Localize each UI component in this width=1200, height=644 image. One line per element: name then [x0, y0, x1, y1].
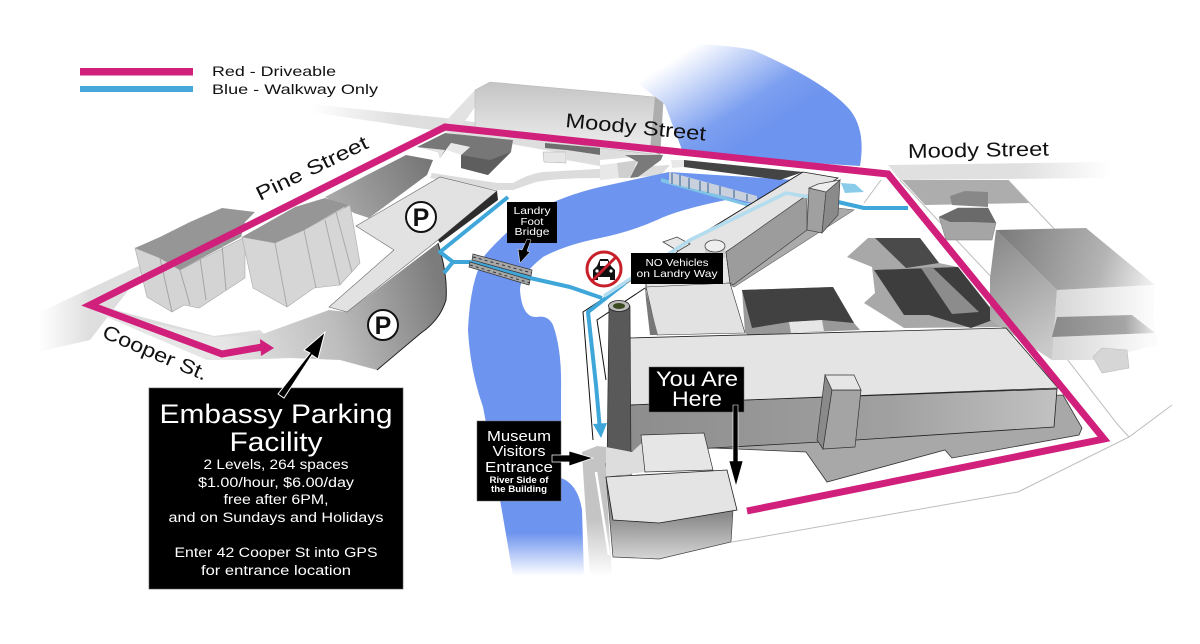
parking deck	[329, 177, 498, 312]
arrow: to foot bridge	[518, 239, 531, 263]
street label: Moody Street right: Moody Street	[908, 139, 1050, 163]
callout: Landry Foot Bridge	[507, 202, 557, 243]
riverside strip	[582, 446, 612, 576]
mill tower	[807, 180, 840, 233]
callout: Museum Visitors Entrance	[477, 421, 561, 501]
walkway arrowhead	[593, 423, 607, 438]
street label: Moody Street centre: Moody Street	[565, 110, 707, 146]
chimney	[606, 300, 632, 476]
callout heading: Facility	[230, 427, 323, 457]
apartment building A	[135, 208, 255, 312]
front museum building	[606, 433, 737, 559]
river	[468, 44, 864, 576]
callout: Museum Visitors Entrance: Visitors	[492, 443, 546, 460]
callout details	[168, 457, 384, 578]
parking symbol upper: P	[413, 204, 429, 232]
pond	[841, 183, 864, 193]
dark building 1	[738, 287, 860, 335]
parking symbol lower	[368, 310, 398, 340]
long mill building	[645, 172, 838, 335]
callout: Landry Foot Bridge: Foot	[520, 216, 544, 228]
callout: Museum Visitors Entrance: Museum	[487, 428, 551, 445]
route arrowhead	[260, 339, 274, 356]
callout details: for entrance location	[201, 563, 351, 578]
wall tower	[817, 375, 861, 449]
dark building 2	[847, 238, 1006, 328]
driveable route	[90, 127, 1104, 511]
big building right	[990, 228, 1158, 373]
callout: You Are Here: You Are	[656, 368, 738, 391]
callout details: Enter 42 Cooper St into GPS	[174, 545, 378, 560]
callout heading	[160, 399, 392, 457]
main mill roof	[628, 328, 1058, 405]
callout: Museum Visitors Entrance: Entrance	[485, 459, 553, 476]
legend label: walkway: Blue - Walkway Only	[212, 81, 378, 97]
street label: Cooper St.: Cooper St.	[99, 321, 211, 385]
callout heading: Embassy Parking	[160, 399, 392, 429]
building block C	[325, 155, 433, 218]
main mill wall	[629, 389, 1057, 452]
row buildings on Moody Street	[417, 133, 684, 180]
callout: Embassy Parking Facility	[149, 388, 403, 589]
callout: Landry Foot Bridge: Bridge	[514, 226, 550, 238]
callout details: and on Sundays and Holidays	[168, 510, 384, 525]
dam	[661, 160, 803, 208]
street label: Pine Street: Pine Street	[253, 132, 372, 205]
outer site outlines	[732, 180, 1172, 542]
roads	[38, 90, 1110, 358]
icon: no vehicles	[587, 252, 621, 286]
roof hatch	[663, 237, 690, 251]
small buildings by Moody Street	[902, 180, 1029, 240]
upper river	[612, 44, 862, 166]
apartment building B	[242, 198, 360, 307]
callout details: free after 6PM,	[224, 492, 328, 507]
Landry Way strip	[583, 172, 803, 440]
parking symbol lower: P	[375, 312, 391, 340]
parking symbol upper	[406, 202, 436, 232]
callout details: $1.00/hour, $6.00/day	[198, 475, 354, 490]
lower river	[468, 172, 795, 576]
lower ramp parking area	[95, 243, 446, 370]
callout: You Are Here	[649, 367, 744, 412]
callout: Museum Visitors Entrance: the Building	[491, 484, 547, 494]
callout: You Are Here: Here	[672, 388, 722, 411]
callout: no vehicles on Landry Way: NO Vehicles	[646, 257, 708, 269]
mill ground shadow	[629, 207, 1082, 482]
legend swatch: driveable	[80, 68, 193, 76]
callout details: 2 Levels, 264 spaces	[204, 457, 349, 472]
arrow: to museum entrance	[552, 451, 593, 466]
arrow: you are here	[729, 405, 743, 486]
arrow: to parking facility	[278, 332, 325, 398]
foot bridge	[469, 254, 532, 285]
roof tank	[705, 240, 725, 258]
walkway blue	[440, 193, 908, 430]
legend swatch: walkway	[80, 86, 193, 92]
callout: Museum Visitors Entrance: River Side of	[490, 475, 550, 485]
legend	[80, 63, 378, 97]
callout: no vehicles on Landry Way	[631, 253, 723, 284]
callout: no vehicles on Landry Way: on Landry Way	[636, 268, 718, 280]
top building	[475, 82, 663, 155]
legend label: driveable: Red - Driveable	[212, 63, 336, 79]
callout: Landry Foot Bridge: Landry	[514, 205, 551, 217]
